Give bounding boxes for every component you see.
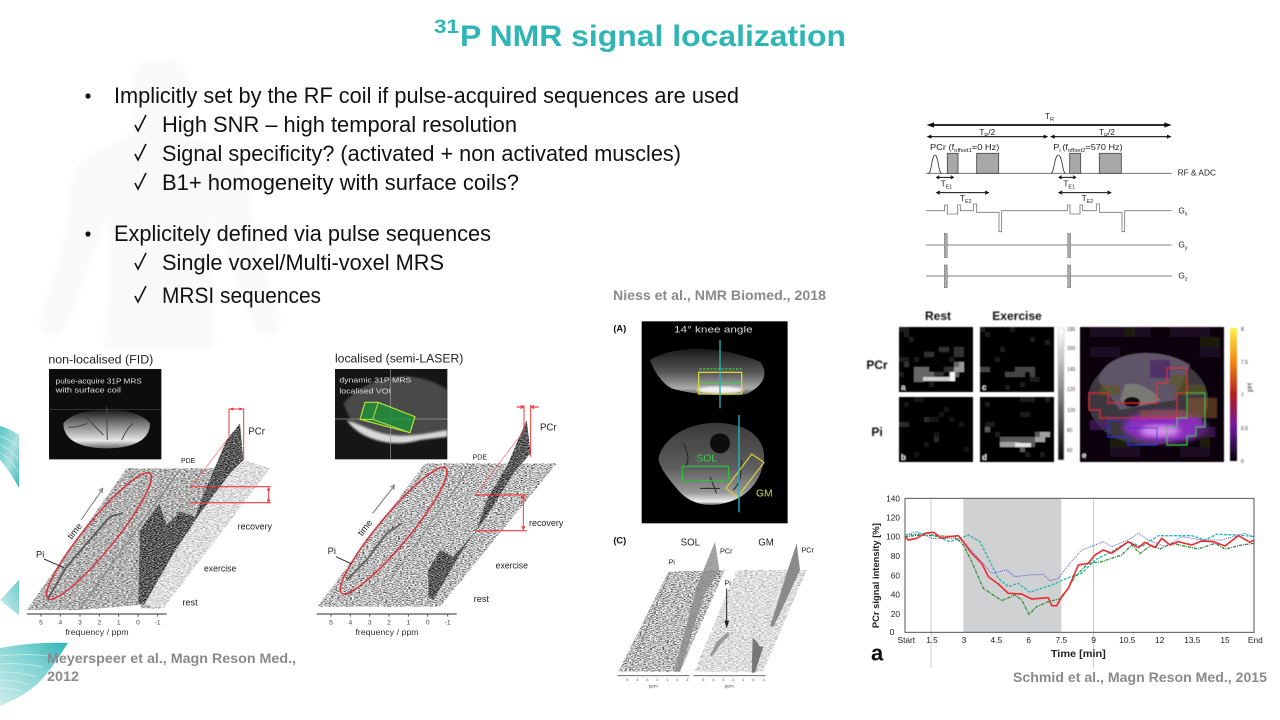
panel C: axes: 4 bbox=[712, 677, 715, 682]
sub-item: B1+ homogeneity: B1+ homogeneity with surface coils? bbox=[162, 170, 519, 195]
x axis labels: 10.5 bbox=[1119, 635, 1136, 645]
panel C label: (C) bbox=[613, 535, 626, 545]
frequency axis: 4 bbox=[58, 619, 62, 626]
figure: Niess panels A and C bbox=[613, 321, 815, 688]
sequence text labels: P bbox=[1053, 142, 1059, 152]
pH colorbar: 8 bbox=[1241, 327, 1244, 333]
grayscale colorbar: 180 bbox=[1067, 327, 1076, 333]
sequence text labels: =570 Hz) bbox=[1085, 142, 1123, 152]
frequency axis: frequency / ppm bbox=[65, 627, 129, 637]
y axis labels: 60 bbox=[891, 570, 900, 580]
citation: Meyerspeer: 2012 bbox=[47, 668, 79, 684]
pH colorbar: 7 bbox=[1241, 393, 1244, 399]
spectrum labels: recovery bbox=[238, 521, 273, 531]
MRI image with surface coil bbox=[49, 369, 161, 459]
panel C: axes: 5 bbox=[626, 677, 629, 682]
sequence text labels: y bbox=[1185, 246, 1188, 252]
sub-item: signal specificity: Signal specificity? (activated + non activated muscles) bbox=[162, 141, 681, 166]
axial calf image bbox=[658, 423, 764, 505]
y axis labels: 120 bbox=[886, 512, 900, 522]
spectrum labels bbox=[328, 423, 564, 604]
spectrum labels: rest bbox=[182, 597, 198, 607]
y axis labels: 80 bbox=[891, 551, 900, 561]
panel C: GM spectrum: GM bbox=[758, 537, 774, 548]
spectrum labels: time bbox=[65, 521, 84, 541]
panel C: axes: 0 bbox=[752, 677, 755, 682]
spectrum labels: PCr bbox=[540, 423, 557, 434]
pH colorbar: 7.5 bbox=[1241, 360, 1248, 366]
x axis labels bbox=[898, 635, 1263, 645]
decorative teal wave shapes at the left edge bbox=[0, 426, 68, 706]
sagittal calf image bbox=[650, 349, 764, 395]
map b: Pi rest bbox=[899, 397, 973, 462]
x axis labels: 13.5 bbox=[1184, 635, 1201, 645]
dotted time markers bbox=[931, 498, 1094, 668]
curve: red mean bbox=[905, 532, 1254, 606]
chart: PCr signal intensity time course bbox=[871, 494, 1263, 668]
row label: Pi: Pi bbox=[871, 425, 883, 439]
x axis labels: 15 bbox=[1220, 635, 1230, 645]
figure: non-localised FID waterfall bbox=[27, 352, 273, 637]
x axis labels: 6 bbox=[1026, 635, 1031, 645]
y axis labels: 140 bbox=[886, 494, 900, 504]
panel A: MRI images: GM bbox=[756, 489, 773, 500]
spectrum labels: Pi bbox=[328, 546, 336, 556]
map e: pH overlay bbox=[1080, 327, 1224, 462]
spectral surface bbox=[27, 423, 270, 610]
y axis labels: 100 bbox=[886, 532, 900, 542]
panel A: MRI images: 14° knee angle bbox=[674, 325, 753, 335]
panel C: GM spectrum bbox=[694, 537, 815, 673]
panel C: SOL spectrum: Pi bbox=[668, 558, 675, 567]
x axis labels: End bbox=[1248, 635, 1263, 645]
y axis labels bbox=[886, 494, 900, 637]
citation: Meyerspeer: Meyerspeer et al., Magn Reson Med., bbox=[47, 650, 296, 666]
grayscale colorbar: 60 bbox=[1067, 448, 1073, 454]
column header: Exercise: Exercise bbox=[992, 309, 1042, 323]
panel C: GM spectrum: PCr bbox=[801, 546, 815, 555]
sequence text labels: offset1 bbox=[954, 148, 972, 154]
sequence text labels: (f bbox=[1062, 142, 1069, 152]
red ellipse around Pi region bbox=[330, 458, 458, 603]
title: 31 bbox=[434, 17, 460, 38]
sequence text labels: T bbox=[941, 179, 946, 189]
MRI image with surface coil: pulse-acquire 31P MRS bbox=[56, 376, 142, 385]
frequency axis: frequency / ppm bbox=[355, 627, 419, 637]
spectrum labels: Pi bbox=[36, 549, 44, 559]
sequence text labels: T bbox=[960, 193, 965, 203]
MRI image with VOI: localised VOI bbox=[339, 386, 391, 395]
TR arrows bbox=[927, 122, 1172, 139]
frequency axis: -1 bbox=[445, 619, 451, 626]
panel C: axes: 5 bbox=[702, 677, 705, 682]
curve: green dash-dot bbox=[905, 535, 1254, 614]
map c: PCr exercise bbox=[980, 327, 1054, 392]
sequence text labels bbox=[930, 111, 1216, 283]
sequence text labels: RF & ADC bbox=[1178, 168, 1216, 178]
panel C: axes: 3 bbox=[722, 677, 725, 682]
sequence text labels: T bbox=[979, 127, 984, 137]
RF and ADC line bbox=[926, 153, 1172, 173]
frequency axis: 0 bbox=[136, 619, 140, 626]
frequency axis: 4 bbox=[348, 619, 352, 626]
frequency axis: 3 bbox=[78, 619, 82, 626]
sequence text labels: G bbox=[1178, 206, 1185, 216]
x axis labels: 7.5 bbox=[1056, 635, 1067, 645]
red ellipse around Pi region bbox=[36, 464, 162, 608]
frequency axis: 5 bbox=[39, 619, 43, 626]
map d: Pi exercise: d bbox=[982, 453, 987, 462]
pH colorbar: pH bbox=[1247, 383, 1254, 392]
x axis labels: 4.5 bbox=[991, 635, 1002, 645]
grayscale colorbar: 80 bbox=[1067, 428, 1073, 434]
grayscale colorbar: 160 bbox=[1067, 346, 1076, 352]
map a: PCr rest bbox=[899, 327, 973, 392]
panel C: GM spectrum: Pi bbox=[724, 578, 731, 587]
frequency axis: 1 bbox=[117, 619, 121, 626]
sequence text labels: T bbox=[1082, 193, 1087, 203]
map d: Pi exercise bbox=[980, 397, 1054, 462]
frequency axis bbox=[27, 614, 167, 637]
title: P NMR signal localization bbox=[460, 20, 846, 53]
sequence text labels: PCr (f bbox=[930, 142, 952, 152]
sub-item: high SNR: High SNR – high temporal resolution bbox=[162, 112, 517, 137]
spectrum labels: PDE bbox=[181, 456, 195, 465]
spectrum labels: recovery bbox=[529, 518, 564, 528]
pH colorbar: 6.5 bbox=[1241, 426, 1248, 432]
panel C: axes: 1 bbox=[666, 677, 669, 682]
x axis labels: 3 bbox=[962, 635, 967, 645]
panel C: axes: -1 bbox=[762, 677, 766, 682]
spectrum labels: time bbox=[356, 518, 374, 538]
x axis labels: 12 bbox=[1155, 635, 1165, 645]
heading: localised: localised (semi-LASER) bbox=[335, 352, 463, 366]
panel C: SOL spectrum bbox=[618, 537, 733, 672]
pH colorbar: 6 bbox=[1241, 459, 1244, 465]
panel C: axes: -1 bbox=[685, 677, 690, 682]
sub-item: single voxel: Single voxel/Multi-voxel MRS bbox=[162, 250, 444, 275]
sequence text labels: R bbox=[1104, 133, 1108, 139]
y axis title: PCr signal intensity [%] bbox=[871, 523, 881, 628]
sequence text labels: i bbox=[1059, 148, 1062, 154]
grayscale colorbar: 120 bbox=[1067, 387, 1076, 393]
frequency axis: 3 bbox=[368, 619, 372, 626]
curve: blue dotted bbox=[905, 532, 1254, 581]
column header: Rest: Rest bbox=[925, 309, 951, 323]
grayscale colorbar: 140 bbox=[1067, 367, 1076, 373]
grayscale colorbar: 100 bbox=[1067, 408, 1076, 414]
panel A: MRI images bbox=[642, 321, 788, 523]
heading: non-localised: non-localised (FID) bbox=[48, 352, 153, 366]
map c: PCr exercise: c bbox=[982, 383, 987, 392]
panel C: axes: ppm bbox=[649, 683, 658, 688]
sequence text labels: E2 bbox=[965, 199, 972, 205]
MRI image with surface coil: with surface coil bbox=[54, 386, 121, 395]
sequence text labels: =0 Hz) bbox=[972, 142, 1000, 152]
citation: Schmid: Schmid et al., Magn Reson Med., 2015 bbox=[1013, 669, 1267, 685]
figure: pulse sequence diagram bbox=[926, 111, 1216, 288]
panel A label: (A) bbox=[613, 323, 626, 333]
sequence text labels: T bbox=[1045, 111, 1050, 121]
sequence text labels: /2 bbox=[1108, 127, 1115, 137]
grayscale colorbar bbox=[1058, 327, 1076, 460]
sequence text labels: R bbox=[1050, 117, 1054, 123]
red PCr width and amplitude markers bbox=[190, 408, 271, 503]
sequence text labels: R bbox=[984, 133, 988, 139]
figure: MRSI metabolite maps bbox=[866, 309, 1254, 465]
panel C: axes: 2 bbox=[732, 677, 735, 682]
sequence text labels: E1 bbox=[946, 185, 952, 191]
figure: localised semi-LASER waterfall bbox=[317, 352, 564, 637]
spectrum labels: exercise bbox=[496, 560, 528, 570]
sequence text labels: /2 bbox=[988, 127, 996, 137]
plot frame bbox=[905, 498, 1254, 632]
spectrum labels: PDE bbox=[473, 452, 487, 461]
y axis labels: 20 bbox=[891, 609, 900, 619]
pH colorbar bbox=[1230, 327, 1254, 465]
time arrow and Pi pointer bbox=[336, 485, 394, 564]
time arrow and Pi pointer bbox=[44, 488, 103, 568]
spectrum labels bbox=[36, 426, 273, 607]
Gy gradient bbox=[926, 233, 1172, 258]
frequency axis: 1 bbox=[406, 619, 410, 626]
frequency axis: 0 bbox=[426, 619, 430, 626]
x axis title: Time [min] bbox=[1051, 649, 1106, 660]
panel C: SOL spectrum: SOL bbox=[681, 537, 701, 548]
frequency axis bbox=[317, 614, 457, 637]
panel C: axes: 3 bbox=[646, 677, 649, 682]
exercise shaded band bbox=[963, 498, 1061, 632]
sequence text labels: T bbox=[1063, 179, 1068, 189]
panel C: axes: 0 bbox=[676, 677, 679, 682]
sequence text labels: G bbox=[1178, 240, 1185, 250]
TE arrows bbox=[937, 176, 1111, 194]
x axis labels: Start bbox=[898, 635, 916, 645]
y axis labels: 0 bbox=[890, 627, 895, 637]
x axis labels: 1.5 bbox=[926, 635, 938, 645]
bullet: implicitly set: Implicitly set by the RF coil if pulse-acquired sequences are used bbox=[114, 83, 739, 108]
y axis labels: 40 bbox=[891, 590, 900, 600]
sequence text labels: G bbox=[1178, 271, 1185, 281]
row label: PCr: PCr bbox=[866, 358, 888, 372]
panel A: MRI images: SOL bbox=[696, 453, 718, 464]
panel C: axes: 4 bbox=[636, 677, 639, 682]
spectral surface bbox=[317, 420, 557, 607]
map a: PCr rest: a bbox=[901, 383, 906, 392]
panel C: axes: 1 bbox=[742, 677, 745, 682]
frequency axis: 2 bbox=[97, 619, 101, 626]
citation: Meyerspeer bbox=[47, 650, 296, 684]
bullet list bbox=[85, 83, 739, 308]
MRI image with VOI bbox=[335, 369, 447, 459]
sequence text labels: z bbox=[1185, 277, 1188, 283]
map b: Pi rest: b bbox=[901, 453, 906, 462]
frequency axis: 5 bbox=[329, 619, 333, 626]
spectrum labels: rest bbox=[474, 594, 490, 604]
MRI image with VOI: dynamic 31P MRS bbox=[339, 376, 411, 385]
background: faint human body silhouette bbox=[40, 60, 280, 349]
spectrum labels: PCr bbox=[248, 426, 266, 437]
sequence text labels: E2 bbox=[1087, 199, 1093, 205]
bullet: explicitly defined: Explicitely defined via pulse sequences bbox=[114, 221, 491, 246]
spectrum labels: exercise bbox=[204, 564, 236, 574]
curve: cyan dashed bbox=[905, 533, 1254, 592]
sequence text labels: offset2 bbox=[1068, 148, 1085, 154]
panel C: axes: 2 bbox=[656, 677, 659, 682]
panel C: axes: ppm bbox=[725, 683, 734, 688]
x axis labels: 9 bbox=[1091, 635, 1096, 645]
frequency axis: -1 bbox=[155, 619, 161, 626]
sequence text labels: T bbox=[1099, 127, 1104, 137]
panel C: axes bbox=[617, 676, 766, 688]
sub-item: MRSI: MRSI sequences bbox=[162, 283, 321, 308]
citation: Niess: Niess et al., NMR Biomed., 2018 bbox=[613, 287, 826, 303]
red PCr width and amplitude markers bbox=[475, 405, 539, 531]
sequence text labels: x bbox=[1185, 212, 1188, 218]
panel C: SOL spectrum: PCr bbox=[720, 546, 733, 555]
Gz gradient bbox=[926, 265, 1172, 288]
sequence text labels: E1 bbox=[1068, 185, 1075, 191]
Gx gradient bbox=[926, 204, 1172, 232]
panel letter a: a bbox=[871, 640, 884, 665]
map e: pH overlay: e bbox=[1082, 451, 1087, 460]
frequency axis: 2 bbox=[387, 619, 391, 626]
